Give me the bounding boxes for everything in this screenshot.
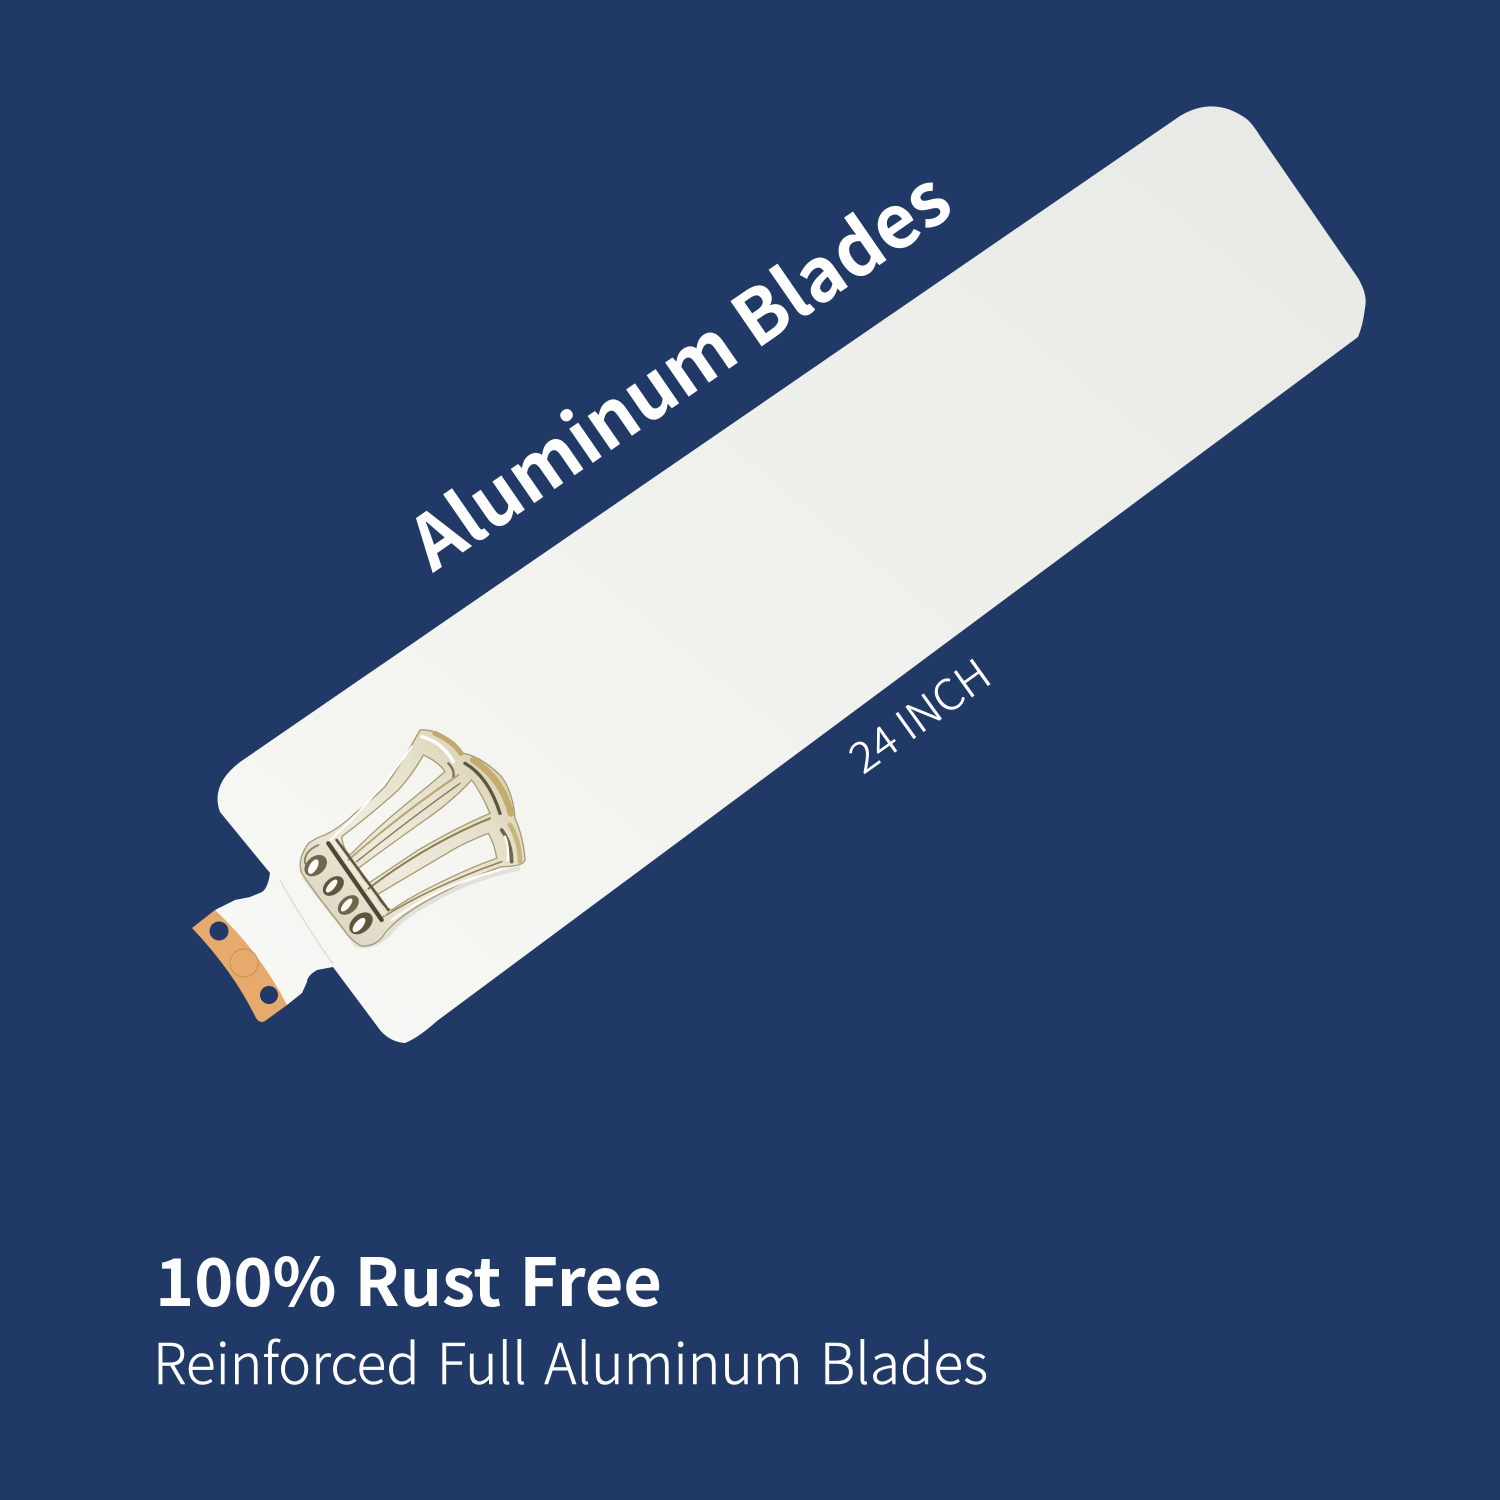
copper mounting tab (192, 910, 287, 1022)
blade body (215, 106, 1366, 1043)
subheading: Reinforced Full Aluminum Blades (153, 1320, 988, 1401)
decorative medallion (300, 730, 525, 946)
fan blade (192, 106, 1366, 1043)
neck crease (280, 880, 333, 964)
medallion bumps (300, 851, 377, 939)
dimension label: 24 INCH: 24 INCH (835, 642, 1001, 786)
headline: 100% Rust Free: 100% Rust Free (155, 1230, 662, 1326)
rotated heading: Aluminum Blades: Aluminum Blades (384, 142, 969, 592)
medallion frame (300, 730, 525, 946)
medallion shadow (303, 868, 520, 946)
medallion highlights (305, 733, 520, 920)
